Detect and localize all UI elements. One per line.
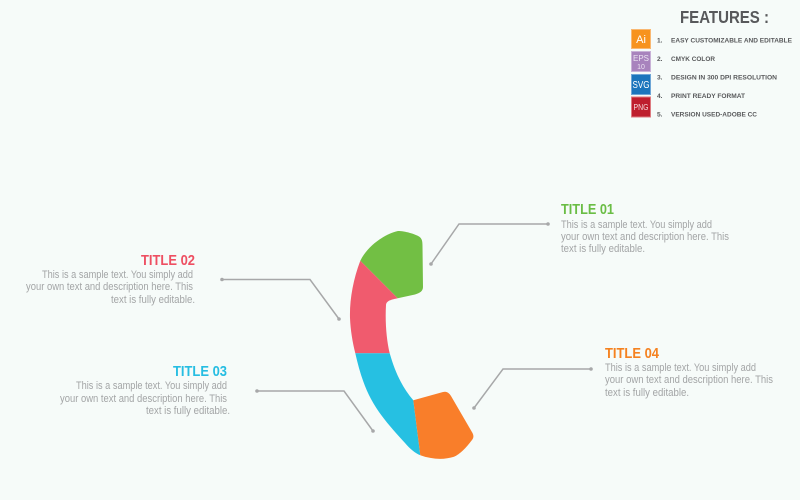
callout 03 <box>60 363 375 433</box>
text 01 <box>561 219 730 255</box>
icon: SVG file <box>632 74 650 94</box>
text 03 <box>60 380 230 417</box>
title 02: TITLE 02 <box>141 252 195 269</box>
phone segment: red <box>350 261 398 353</box>
icon: SVG file: SVG <box>632 80 650 91</box>
icon: EPS file: 10 <box>637 64 645 71</box>
icon: PNG file: PNG <box>634 103 648 112</box>
phone segment: green <box>360 231 423 298</box>
features heading: FEATURES : <box>680 7 769 27</box>
icon: Ai file <box>632 30 650 48</box>
callout 04 <box>472 345 774 410</box>
icon: Ai file: Ai <box>636 34 646 46</box>
callout 02 <box>26 252 341 321</box>
leader line 01 <box>429 222 550 266</box>
features list: CMYK COLOR <box>671 56 715 63</box>
phone handset <box>350 231 473 459</box>
text 04: This is a sample text. You simply add <box>605 362 756 374</box>
icon: EPS file: EPS <box>633 54 649 63</box>
text 04: your own text and description here. This <box>605 374 774 386</box>
features list: PRINT READY FORMAT <box>671 93 745 100</box>
phone segment: blue <box>355 353 420 455</box>
leader line 04 <box>472 367 593 410</box>
text 03: text is fully editable. <box>146 405 230 417</box>
text 03: your own text and description here. This <box>60 393 228 405</box>
leader line 03 <box>255 389 375 433</box>
text 01: This is a sample text. You simply add <box>561 219 712 231</box>
title 03: TITLE 03 <box>173 363 227 380</box>
leader line 02 <box>220 278 341 321</box>
text 02 <box>26 269 195 306</box>
features panel <box>632 7 793 118</box>
text 02: your own text and description here. This <box>26 281 194 293</box>
text 04: text is fully editable. <box>605 387 689 399</box>
phone segment: orange <box>413 392 473 459</box>
features list: 3. <box>657 74 663 82</box>
text 03: This is a sample text. You simply add <box>76 380 227 392</box>
title 04: TITLE 04 <box>605 345 660 362</box>
text 02: text is fully editable. <box>111 294 195 306</box>
text 01: your own text and description here. This <box>561 231 730 243</box>
features list: VERSION USED-ADOBE CC <box>671 112 757 118</box>
icon: PNG file <box>632 97 650 117</box>
features list: 2. <box>657 56 663 63</box>
title 01: TITLE 01 <box>561 201 614 218</box>
features list: 1. <box>657 38 663 44</box>
callout 01 <box>429 201 730 266</box>
text 04 <box>605 362 774 399</box>
features list: 4. <box>657 93 663 100</box>
features list <box>657 38 793 118</box>
text 01: text is fully editable. <box>561 243 645 255</box>
features list: DESIGN IN 300 DPI RESOLUTION <box>671 74 777 82</box>
features list: 5. <box>657 112 663 118</box>
text 02: This is a sample text. You simply add <box>42 269 193 281</box>
icon: EPS file <box>632 52 650 72</box>
features list: EASY CUSTOMIZABLE AND EDITABLE <box>671 38 793 44</box>
